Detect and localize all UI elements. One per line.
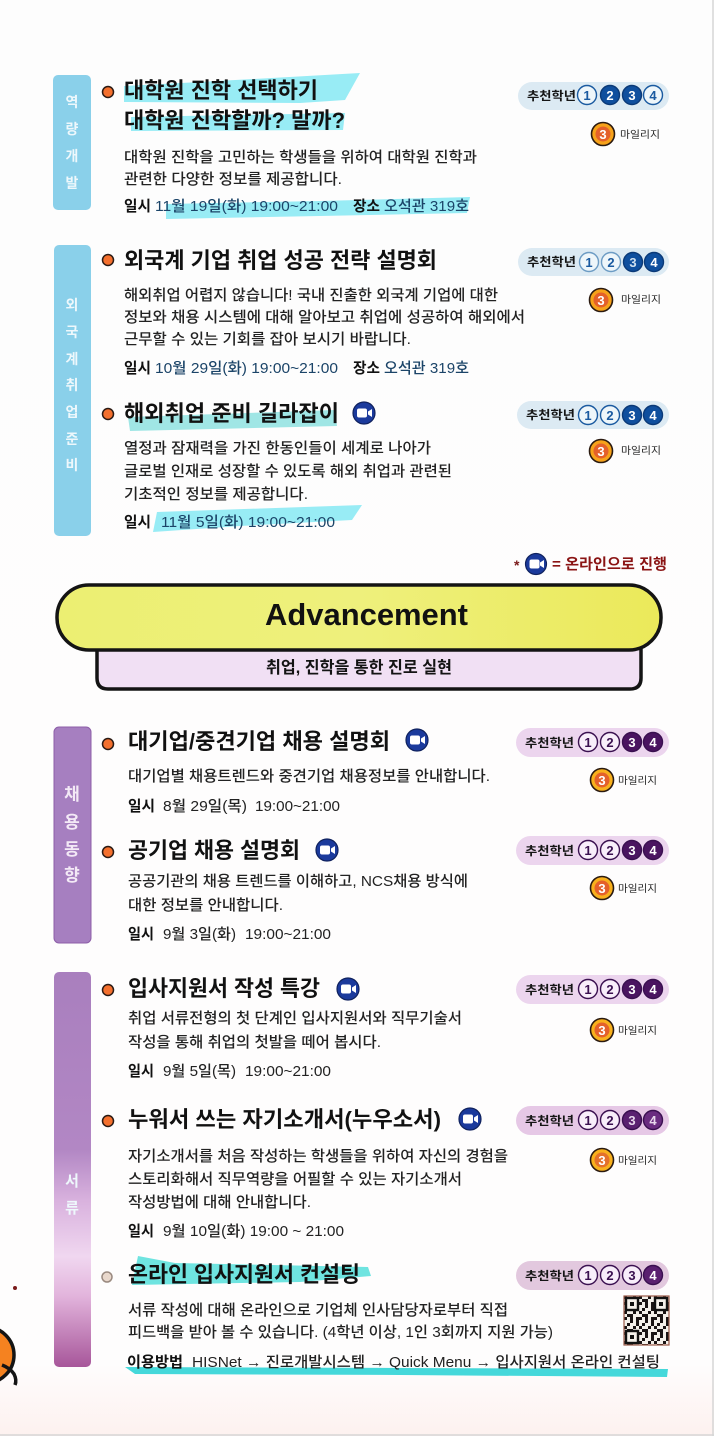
mileage badge: row 3: 3 [597, 444, 605, 459]
bullet [102, 984, 114, 996]
date: 19:00~21:00 [245, 1063, 331, 1080]
bullet [102, 254, 114, 266]
grade pill: row 2: 2 [607, 255, 615, 270]
mileage badge: row 5: 마일리지 [618, 883, 657, 895]
date and place: 일시 [124, 198, 151, 215]
section: 입사지원서 작성 특강 [102, 976, 462, 1080]
mileage badge: row 4: 3 [598, 773, 606, 788]
mileage badge: row 1: 3 [599, 127, 607, 142]
description [128, 1010, 462, 1051]
grade pill: row 8: 추천학년 [525, 1268, 574, 1283]
description: 작성방법에 대해 안내합니다. [128, 1194, 311, 1211]
grade pill: row 7: 추천학년 [525, 1113, 574, 1128]
panel: 역량개발 side label: 량 [66, 121, 79, 137]
date: 일시 [128, 1063, 154, 1080]
mileage badge: row 6 [590, 1018, 657, 1042]
grade pill: row 4 [516, 728, 669, 757]
icon: online video [459, 1108, 481, 1130]
date and place [124, 198, 469, 215]
highlight: 온라인 컨설팅 title [132, 1256, 371, 1285]
icon: online video [406, 729, 428, 751]
panel: 역량개발 side label: 발 [66, 175, 79, 191]
mileage badge: row 5: 3 [598, 881, 606, 896]
grade pill: row 1 [518, 82, 669, 110]
panel: 채용동향 side label: 향 [64, 866, 80, 885]
grade pill: row 3: 추천학년 [526, 407, 575, 422]
description: 취업 서류전형의 첫 단계인 입사지원서와 직무기술서 [128, 1010, 462, 1027]
description: 관련한 다양한 정보를 제공합니다. [124, 171, 342, 188]
panel: 서류 side label [54, 972, 91, 1367]
mileage badge: row 6: 마일리지 [618, 1025, 657, 1037]
grade pill: row 5: 2 [606, 843, 614, 858]
grade pill: row 4: 4 [649, 735, 657, 750]
date and place: 장소 [353, 198, 380, 215]
icon: online video [337, 978, 359, 1000]
description [124, 149, 477, 188]
grade pill: row 8: 4 [649, 1268, 657, 1283]
grade pill: row 1: 4 [649, 88, 657, 103]
date [128, 1063, 331, 1080]
description: 공공기관의 채용 트렌드를 이해하고, NCS채용 방식에 [128, 873, 468, 890]
panel: 채용동향 side label [54, 727, 91, 943]
panel: 외국계취업준비 side label: 외 [66, 297, 78, 313]
date: 9월 3일(화) [163, 926, 236, 943]
grade pill: row 2: 1 [585, 255, 593, 270]
heading: 해외취업 준비 길라잡이 [124, 401, 339, 426]
heading: 입사지원서 작성 특강 [128, 976, 320, 1001]
heading: 외국계 기업 취업 성공 전략 설명회 [124, 248, 437, 273]
date: 11월 5일(화) 19:00~21:00 [161, 514, 335, 531]
description: 정보와 채용 시스템에 대해 알아보고 취업에 성공하여 해외에서 [124, 309, 525, 326]
panel: 역량개발 side label: 개 [66, 148, 78, 164]
grade pill: row 5: 4 [649, 843, 657, 858]
highlight: 대학원 진학 date [166, 197, 470, 219]
QR code [624, 1296, 669, 1345]
bullet [102, 1272, 112, 1282]
grade pill: row 5 [516, 836, 669, 865]
grade pill: row 8: 2 [606, 1268, 614, 1283]
grade pill: row 7: 1 [584, 1113, 592, 1128]
grade pill: row 3: 3 [628, 408, 636, 423]
heading: 온라인 입사지원서 컨설팅 [128, 1262, 360, 1287]
panel: 역량개발 side label: 역 [66, 94, 78, 110]
mileage badge: row 1: 마일리지 [620, 129, 660, 141]
heading: 누워서 쓰는 자기소개서(누우소서) [128, 1107, 441, 1132]
grade pill: row 6: 추천학년 [525, 982, 574, 997]
grade pill: row 2 [518, 248, 669, 276]
description [124, 287, 525, 348]
icon: online video [353, 402, 375, 424]
panel: 외국계취업준비 side label: 비 [66, 457, 78, 473]
section: 누워서 쓰는 자기소개서 [102, 1107, 508, 1240]
date [128, 798, 340, 815]
small red dot [13, 1286, 17, 1290]
highlight: 해외취업 date [153, 505, 362, 532]
grade pill: row 4: 추천학년 [525, 735, 574, 750]
description: 열정과 잠재력을 가진 한동인들이 세계로 나아가 [124, 440, 431, 457]
grade pill: row 3: 2 [606, 408, 614, 423]
date: 일시 [128, 926, 154, 943]
panel: 외국계취업준비 side label: 취 [66, 377, 78, 393]
date and place: 오석관 319호 [384, 198, 469, 215]
date and place: 장소 [353, 360, 380, 377]
grade pill: row 7: 4 [649, 1113, 657, 1128]
mileage badge: row 2 [590, 288, 661, 312]
grade pill: row 2: 3 [629, 255, 637, 270]
grade pill: row 1: 3 [628, 88, 636, 103]
panel: 외국계취업준비 side label: 국 [66, 324, 79, 340]
highlight: 대학원 진학 title [124, 73, 360, 131]
grade pill: row 6: 4 [649, 982, 657, 997]
description [124, 440, 452, 503]
grade pill: row 3: 1 [584, 408, 592, 423]
section: 공기업 채용 설명회 [102, 838, 468, 943]
grade pill: row 8 [516, 1261, 669, 1290]
description: 기초적인 정보를 제공합니다. [124, 486, 308, 503]
legend: online indicator [514, 554, 667, 574]
mileage badge: row 2: 마일리지 [621, 294, 661, 306]
banner: Advancement [57, 585, 661, 650]
mileage badge: row 4 [590, 768, 657, 792]
description [128, 1148, 508, 1211]
description: 대학원 진학을 고민하는 학생들을 위하여 대학원 진학과 [124, 149, 477, 166]
bullet [102, 408, 114, 420]
description [128, 873, 468, 914]
date: 일시 [128, 1223, 154, 1240]
how to use: 이용방법 [127, 1354, 183, 1371]
date: 8월 29일(목) [163, 798, 247, 815]
grade pill: row 8: 3 [628, 1268, 636, 1283]
panel: 외국계취업준비 side label [54, 245, 91, 536]
icon: online video [316, 839, 338, 861]
grade pill: row 8: 1 [584, 1268, 592, 1283]
grade pill: row 7 [516, 1106, 669, 1135]
heading: 대기업/중견기업 채용 설명회 [128, 729, 390, 754]
description: 피드백을 받아 볼 수 있습니다. (4학년 이상, 1인 3회까지 지원 가능) [128, 1324, 553, 1341]
panel: 외국계취업준비 side label: 계 [66, 351, 78, 367]
panel: 채용동향 side label: 동 [64, 840, 80, 859]
date [128, 926, 331, 943]
description [128, 1302, 553, 1341]
grade pill: row 4: 2 [606, 735, 614, 750]
grade pill: row 5: 3 [628, 843, 636, 858]
mileage badge: row 7: 마일리지 [618, 1155, 657, 1167]
section: 온라인 입사지원서 컨설팅 [102, 1262, 660, 1371]
grade pill: row 5: 추천학년 [525, 843, 574, 858]
description: 자기소개서를 처음 작성하는 학생들을 위하여 자신의 경험을 [128, 1148, 508, 1165]
description: 대기업별 채용트렌드와 중견기업 채용정보를 안내합니다. [128, 768, 490, 785]
bullet [102, 846, 114, 858]
section: 대기업/중견기업 채용 설명회 [102, 729, 490, 815]
grade pill: row 5: 1 [584, 843, 592, 858]
mileage badge: row 2: 3 [597, 293, 605, 308]
grade pill: row 1: 추천학년 [527, 88, 576, 103]
mileage badge: row 6: 3 [598, 1023, 606, 1038]
mileage badge: row 1 [592, 122, 660, 146]
date and place: 오석관 319호 [384, 360, 469, 377]
date: 일시 [124, 514, 151, 531]
grade pill: row 6: 3 [628, 982, 636, 997]
subtitle bar: 취업, 진학을 통한 진로 실현 [97, 640, 641, 689]
date and place: 10월 29일(화) 19:00~21:00 [155, 360, 338, 377]
mileage badge: row 3: 마일리지 [621, 445, 661, 457]
date: 일시 [128, 798, 155, 815]
decorative character: orange circle at edge [0, 1327, 16, 1385]
mileage badge: row 7: 3 [598, 1153, 606, 1168]
heading: 공기업 채용 설명회 [128, 838, 300, 863]
heading [124, 78, 345, 133]
description: 근무할 수 있는 기회를 잡아 보시기 바랍니다. [124, 331, 411, 348]
description: 대한 정보를 안내합니다. [128, 897, 283, 914]
heading: 대학원 진학할까? 말까? [124, 108, 345, 133]
date: 9월 10일(화) 19:00 ~ 21:00 [163, 1223, 344, 1240]
grade pill: row 6 [516, 975, 669, 1004]
grade pill: row 2: 4 [650, 255, 658, 270]
grade pill: row 2: 추천학년 [527, 254, 576, 269]
mileage badge: row 4: 마일리지 [618, 775, 657, 787]
grade pill: row 1: 1 [583, 88, 591, 103]
legend: online indicator: * [514, 557, 520, 573]
grade pill: row 3 [517, 401, 669, 429]
description: 해외취업 어렵지 않습니다! 국내 진출한 외국계 기업에 대한 [124, 287, 498, 304]
section: 대학원 진학 선택하기 [102, 78, 477, 215]
description: 글로벌 인재로 성장할 수 있도록 해외 취업과 관련된 [124, 463, 452, 480]
grade pill: row 7: 2 [606, 1113, 614, 1128]
mileage badge: row 5 [590, 876, 657, 900]
bullet [102, 738, 114, 750]
grade pill: row 1: 2 [606, 88, 614, 103]
panel: 채용동향 side label: 용 [64, 813, 80, 832]
how to use: HISNet → 진로개발시스템 → Quick Menu → 입사지원서 온라인 컨설팅 [192, 1354, 660, 1371]
section: 외국계 기업 취업 성공 전략 설명회 [102, 248, 525, 377]
banner: Advancement: Advancement [265, 597, 468, 632]
grade pill: row 6: 1 [584, 982, 592, 997]
grade pill: row 6: 2 [606, 982, 614, 997]
grade pill: row 7: 3 [628, 1113, 636, 1128]
panel: 서류 side label: 서 [65, 1173, 79, 1190]
description: 서류 작성에 대해 온라인으로 기업체 인사담당자로부터 직접 [128, 1302, 508, 1319]
panel: 역량개발 side label [53, 75, 91, 210]
description: 스토리화해서 직무역량을 어필할 수 있는 자기소개서 [128, 1171, 462, 1188]
date and place: 일시 [124, 360, 151, 377]
legend: online indicator: = 온라인으로 진행 [552, 556, 667, 573]
panel: 채용동향 side label: 채 [64, 785, 80, 804]
description: 작성을 통해 취업의 첫발을 떼어 봅시다. [128, 1034, 381, 1051]
mileage badge: row 3 [590, 440, 661, 462]
mileage badge: row 7 [590, 1148, 657, 1172]
bullet [102, 86, 114, 98]
date: 19:00~21:00 [255, 798, 340, 815]
bullet [102, 1116, 114, 1126]
section: 해외취업 준비 길라잡이 [102, 401, 452, 531]
heading: 대학원 진학 선택하기 [124, 78, 318, 103]
panel: 외국계취업준비 side label: 업 [66, 404, 78, 420]
date: 19:00~21:00 [245, 926, 331, 943]
highlight: 해외취업 title [128, 410, 337, 431]
grade pill: row 4: 1 [584, 735, 592, 750]
date and place: 11월 19일(화) 19:00~21:00 [155, 198, 338, 215]
subtitle bar: 취업, 진학을 통한 진로 실현: 취업, 진학을 통한 진로 실현 [266, 658, 452, 677]
grade pill: row 4: 3 [628, 735, 636, 750]
highlight: 이용방법 line [125, 1367, 668, 1377]
grade pill: row 3: 4 [649, 408, 657, 423]
panel: 외국계취업준비 side label: 준 [66, 431, 79, 447]
panel: 서류 side label: 류 [65, 1200, 79, 1217]
date and place [124, 360, 469, 377]
date: 9월 5일(목) [163, 1063, 236, 1080]
